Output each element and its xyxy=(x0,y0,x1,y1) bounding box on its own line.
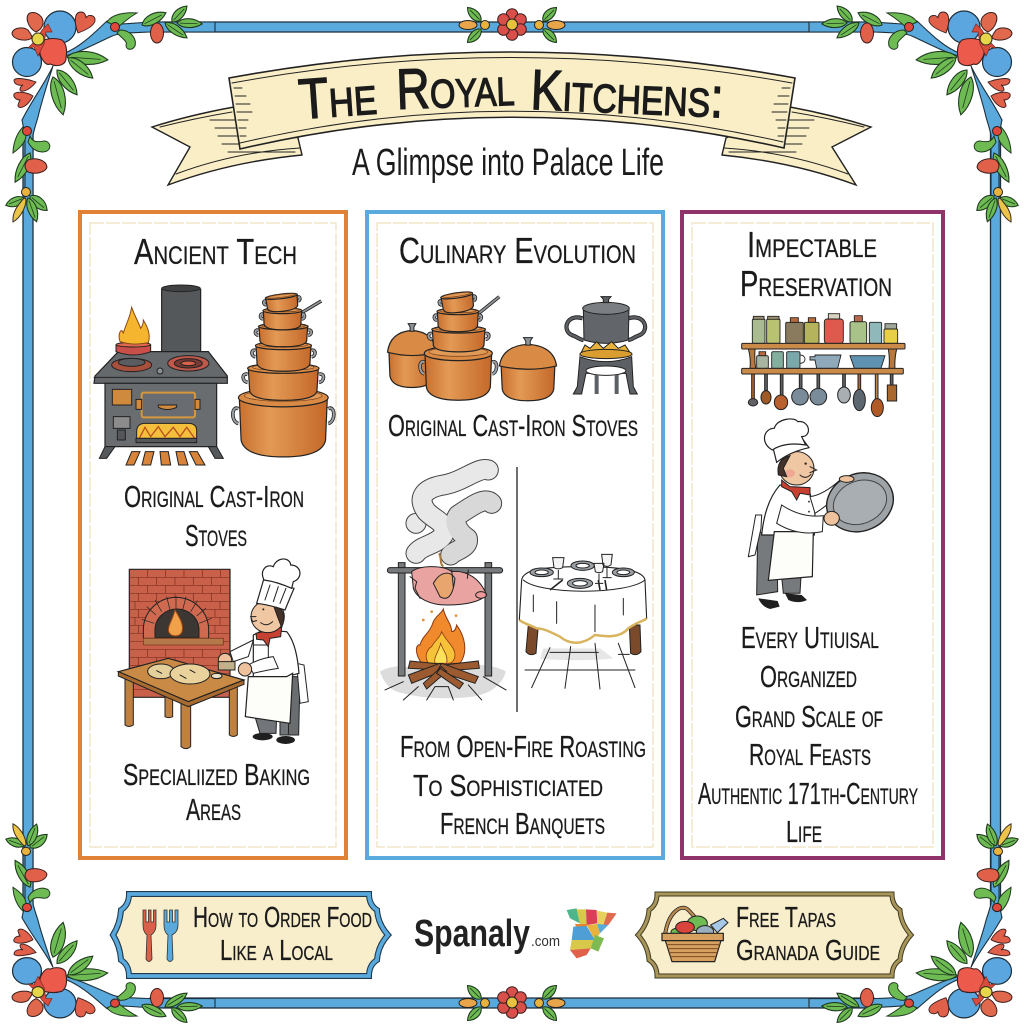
icon: iron pot on stand xyxy=(566,297,645,394)
text: original cast-iron stoves: Stoves xyxy=(185,518,247,553)
ribbon left tail xyxy=(152,107,302,185)
text: preservation list: Every Utiuisal xyxy=(741,620,879,655)
text: specialized baking areas: Specialiized Baking xyxy=(123,757,310,792)
smoke xyxy=(406,470,492,555)
heading: Preservation xyxy=(740,263,892,304)
icon: lidded copper pot xyxy=(388,324,436,387)
icon: basket xyxy=(662,908,728,962)
text: preservation list xyxy=(698,620,918,849)
link card: free tapas granada guide xyxy=(638,894,911,976)
panel: ancient tech xyxy=(80,212,346,858)
text: open-fire roasting to banquets: French Banquets xyxy=(440,806,605,841)
panel frame xyxy=(367,212,663,858)
corner ornament: bottom right xyxy=(809,823,1020,1024)
title banner xyxy=(152,52,871,185)
text: preservation list: Life xyxy=(786,814,822,849)
icon: fork and spoon xyxy=(143,910,178,962)
icon: brick oven xyxy=(129,569,230,697)
panel: culinary evolution xyxy=(367,212,663,858)
icon: lidded copper pot small xyxy=(499,338,557,401)
corner ornament: top left xyxy=(4,3,215,223)
subtitle: A Glimpse into Palace Life xyxy=(352,142,664,184)
link text: How to Order Food xyxy=(193,902,372,934)
icon: open fire roast xyxy=(380,470,506,700)
link card: how to order food xyxy=(113,894,388,976)
icon: cast-iron stove xyxy=(94,285,227,465)
heading: Impectable xyxy=(747,224,877,265)
text: specialized baking areas: Areas xyxy=(186,792,241,827)
logo: spanaly.com: .com xyxy=(531,933,560,950)
icon: baker chef xyxy=(218,559,308,744)
icon: banquet table xyxy=(519,554,647,689)
title text: The xyxy=(296,63,379,132)
text: original cast-iron stoves: Original Cast-Iron xyxy=(124,479,304,514)
ribbon main band xyxy=(229,52,795,149)
icon: copper pot stack xyxy=(420,290,499,400)
icon: chef with silver tray xyxy=(748,419,902,609)
panel frame xyxy=(682,212,943,858)
text: original cast-iron stoves xyxy=(124,479,304,553)
title text xyxy=(296,54,725,132)
title text: Royal xyxy=(395,54,515,122)
link card: free tapas granada guide: Granada Guide xyxy=(736,935,880,967)
ash ground xyxy=(380,665,506,698)
bottom center flower ornament xyxy=(459,982,565,1024)
text: open-fire roasting to banquets: From Open-Fire Roasting xyxy=(400,729,646,764)
logs xyxy=(408,661,479,689)
text: original cast-iron stoves: Original Cast-Iron Stoves xyxy=(388,408,638,443)
icon: shelves with jars and utensils xyxy=(742,314,905,417)
fire xyxy=(416,609,465,663)
logo: spanaly.com xyxy=(414,908,617,958)
heading: Ancient Tech xyxy=(134,231,297,272)
icon: dough table xyxy=(118,658,244,749)
text: preservation list: Organized xyxy=(760,659,857,694)
corner ornament: bottom left xyxy=(4,823,215,1024)
text: specialized baking areas xyxy=(123,757,310,827)
link card: how to order food: Like a Local xyxy=(220,935,333,967)
icon: copper pot stack xyxy=(233,292,334,457)
ribbon right tail xyxy=(722,107,871,185)
text: preservation list: Royal Feasts xyxy=(749,737,871,772)
text: preservation list: Grand Scale of xyxy=(735,699,883,734)
corner ornament: top right xyxy=(809,3,1020,223)
logo: spanaly.com: Spanaly xyxy=(414,913,530,955)
heading: Culinary Evolution xyxy=(399,230,636,271)
title text: Kitchens: xyxy=(529,58,725,130)
text: open-fire roasting to banquets: To Sophisticiated xyxy=(413,768,603,803)
top center flower ornament xyxy=(459,4,565,46)
panel: impeccable preservation xyxy=(682,212,943,858)
pig xyxy=(412,567,487,605)
link text: Free Tapas xyxy=(736,902,836,934)
icon: map of spain xyxy=(567,908,617,958)
heading xyxy=(740,224,892,304)
text: open-fire roasting to banquets xyxy=(400,729,646,841)
panel frame xyxy=(80,212,346,858)
divider line xyxy=(516,467,518,712)
